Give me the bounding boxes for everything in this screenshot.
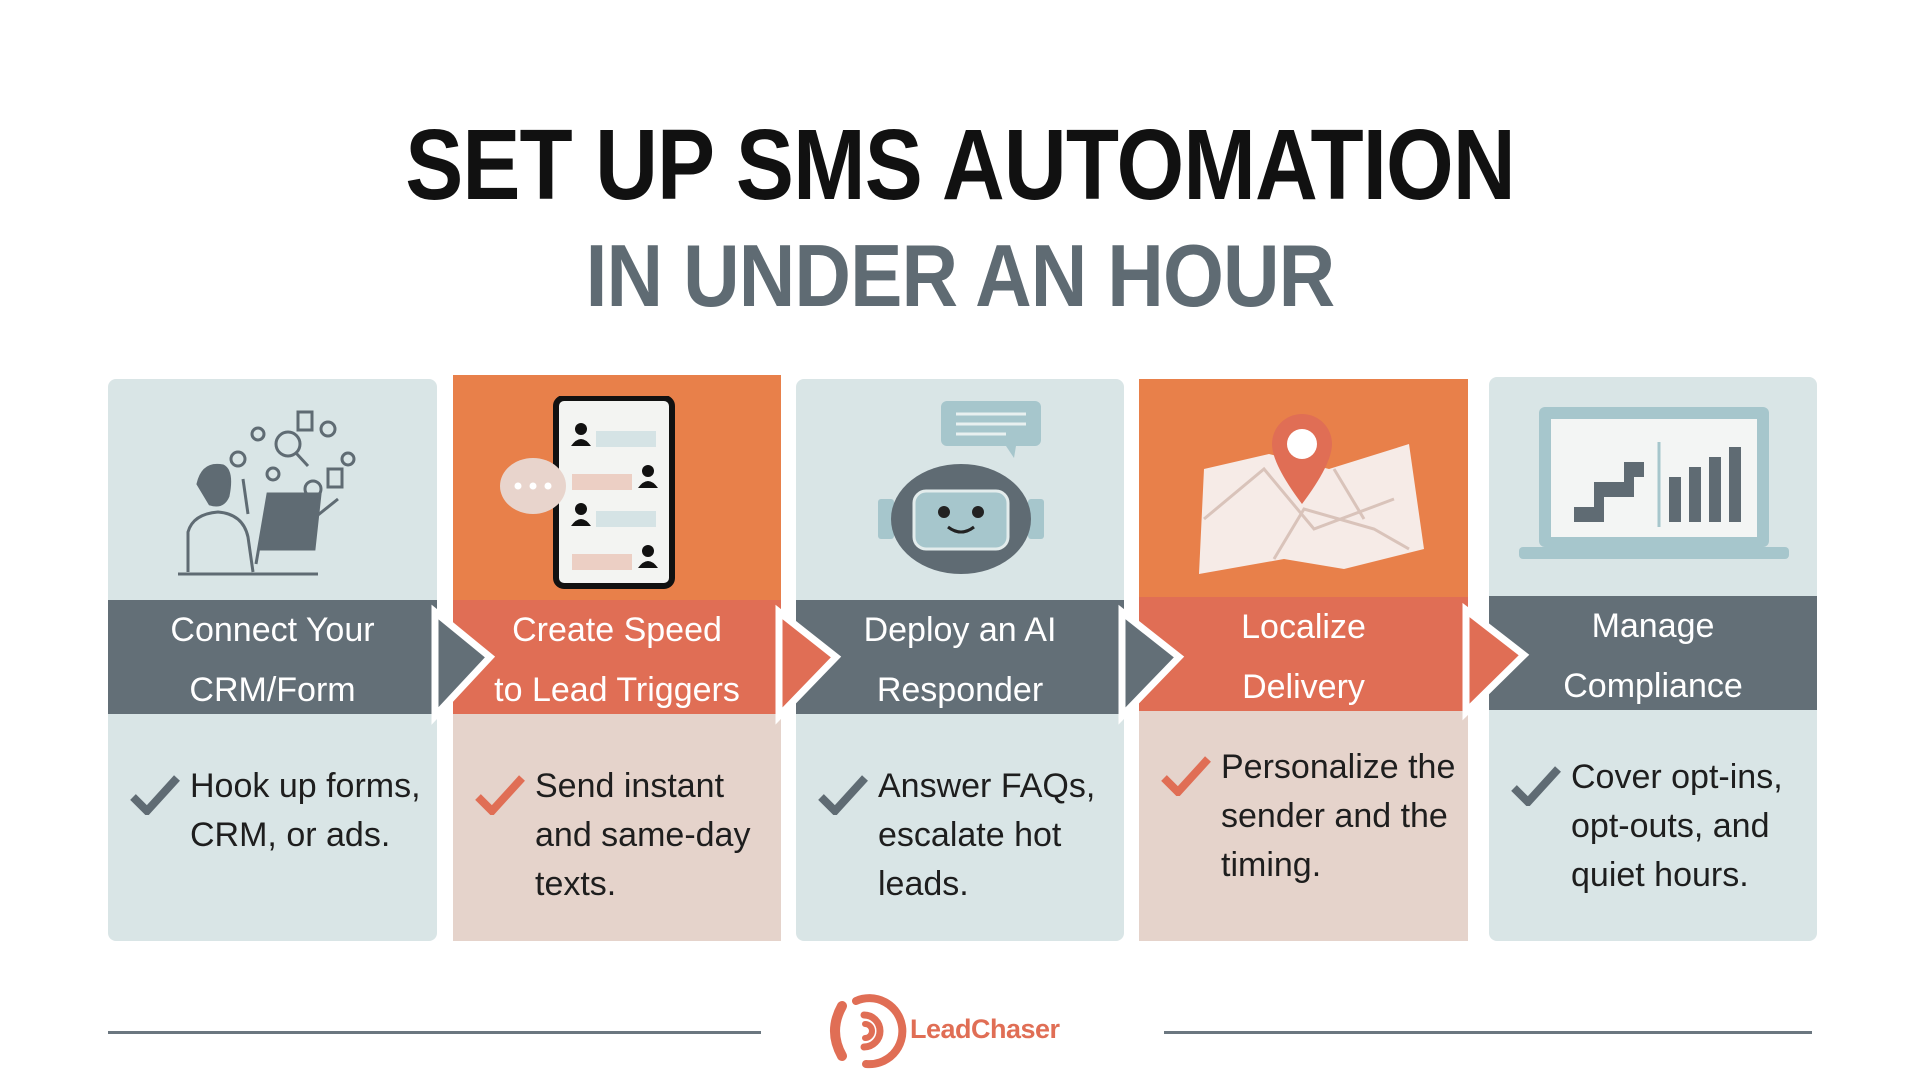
band: step 3 title (796, 600, 1124, 714)
band: step 4 title: Localize (1241, 608, 1366, 646)
band: step 5 title (1489, 596, 1817, 710)
panel: step 5 (1489, 377, 1817, 941)
text: step 3 (878, 767, 1095, 903)
text: step 2: Send instant (535, 767, 724, 805)
text: step 2: texts. (535, 865, 616, 903)
text: step 4 (1221, 748, 1455, 884)
panel: step 2 (453, 379, 781, 941)
text: step 5 (1571, 758, 1783, 894)
text: step 5: quiet hours. (1571, 856, 1749, 894)
panel: step 3 (796, 379, 1124, 941)
subtitle: IN UNDER AN HOUR (586, 226, 1334, 325)
band: step 1 title: Connect Your (170, 611, 375, 649)
checkmark (1511, 766, 1561, 806)
text: step 1: CRM, or ads. (190, 816, 390, 854)
logo: LeadChaser (830, 994, 1060, 1068)
text: step 1: Hook up forms, (190, 767, 421, 805)
band: step 2 title: Create Speed (512, 611, 722, 649)
text: step 3: escalate hot (878, 816, 1061, 854)
band: step 4 title (1139, 597, 1468, 711)
band: step 5 title: Manage (1592, 607, 1714, 645)
text: step 4: sender and the (1221, 797, 1448, 835)
icon: robot (878, 401, 1044, 574)
text: step 3: leads. (878, 865, 969, 903)
panel: step 1 (108, 379, 437, 941)
text: step 2 (535, 767, 750, 903)
footer lines (108, 1031, 761, 1034)
band: step 4 title: Delivery (1242, 668, 1365, 706)
band: step 1 title (108, 600, 437, 714)
icon: person at computer (178, 410, 356, 576)
icon: phone chat (500, 396, 675, 589)
band: step 1 title: CRM/Form (189, 671, 356, 709)
text: step 5: Cover opt-ins, (1571, 758, 1783, 796)
text: step 2: and same-day (535, 816, 750, 854)
checkmark (130, 775, 180, 815)
text: step 4: Personalize the (1221, 748, 1455, 786)
logo: LeadChaser: LeadChaser (910, 1014, 1060, 1044)
text: step 5: opt-outs, and (1571, 807, 1769, 845)
text: step 4: timing. (1221, 846, 1321, 884)
band: step 2 title (453, 600, 781, 714)
text: step 3: Answer FAQs, (878, 767, 1095, 805)
band: step 2 title: to Lead Triggers (494, 671, 740, 709)
band: step 3 title: Deploy an AI (864, 611, 1056, 649)
band: step 5 title: Compliance (1563, 667, 1743, 705)
checkmark (818, 775, 868, 815)
checkmark (475, 775, 525, 815)
icon: laptop with charts (1519, 407, 1789, 559)
title: SET UP SMS AUTOMATION (405, 109, 1515, 221)
icon: map pin (1199, 414, 1424, 574)
panel: step 4 (1139, 379, 1468, 941)
text: step 1 (190, 767, 421, 854)
checkmark (1161, 756, 1211, 796)
band: step 3 title: Responder (877, 671, 1043, 709)
